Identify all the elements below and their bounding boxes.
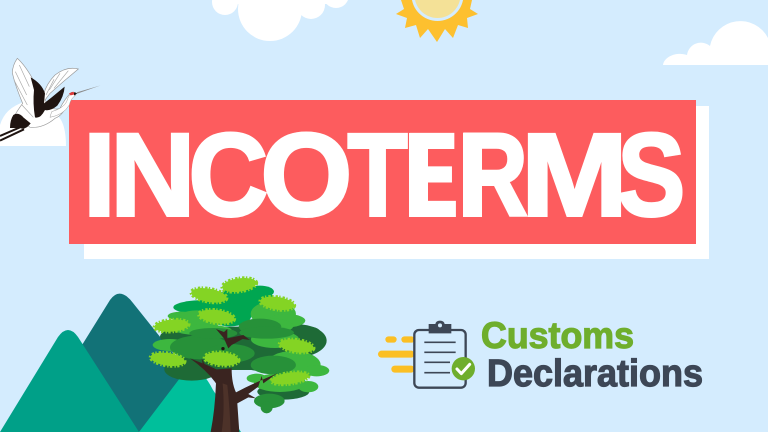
logo word: Customs: Customs [481,315,634,356]
icon: clipboard with check [414,321,475,388]
logo: Customs Declarations [378,315,703,395]
cloud: left behind crane [0,101,66,146]
title: N [110,110,196,242]
white title shadow panel [84,106,709,259]
icon: mountains [0,294,241,432]
dark foliage [160,324,327,400]
mid green foliage [170,319,296,413]
bright foliage [153,301,329,392]
right mountain [139,370,241,432]
title: T [348,110,408,242]
title: O [260,110,352,242]
top green foliage [173,286,275,326]
title: R [458,108,528,241]
icon: speed lines [378,336,415,373]
title: S [618,109,685,241]
icon: flying crane [0,58,101,141]
icon: sun [396,0,478,42]
back mountain [28,294,236,432]
title: I [83,110,116,242]
cloud: top centre [212,0,349,41]
logo word: Declarations: Declarations [487,353,703,395]
trunk and branches [190,358,277,432]
title banner [69,100,696,244]
cloud: top right [663,21,768,65]
title [83,108,685,242]
title: C [188,110,268,241]
title: E [405,110,458,241]
icon: tree [150,276,329,432]
left mountain [0,330,139,432]
light leaf clusters [150,276,315,387]
title: M [521,109,628,241]
